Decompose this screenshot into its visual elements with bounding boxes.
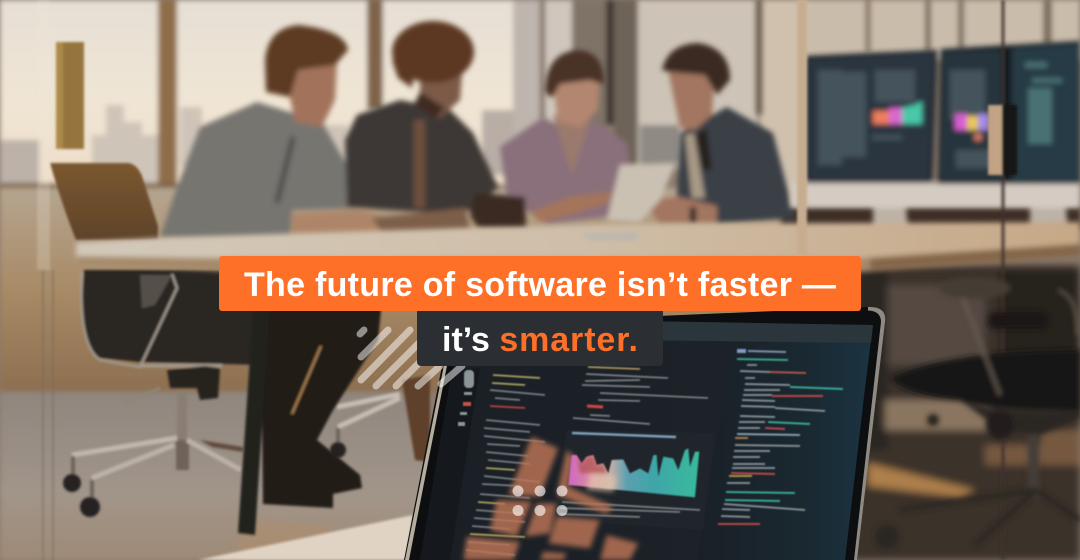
headline line 1: orange banner [219,256,861,311]
screens [806,50,937,183]
floor [0,392,430,560]
monitor stand bar [790,183,1080,208]
white foreground table corner [198,515,413,560]
chair back [50,163,158,240]
city skyline [0,105,680,184]
person 1: grey shirt [160,25,405,238]
glass partition lines [43,270,53,560]
laptop body [404,307,885,560]
area chart [568,448,699,497]
lower wall [0,188,800,392]
dot grid decoration [512,486,568,516]
second chair base behind legs [337,394,400,427]
code lines: right column [718,351,843,524]
window frames [158,0,1052,184]
screen text hints [818,70,991,168]
thin dark post [1001,0,1005,560]
right lower room [850,265,1080,560]
chart panel [552,430,715,530]
person 2: dark shirt with afro [345,21,498,238]
seat and dark underside [82,270,262,365]
tablet [470,193,526,230]
sidebar icons [458,370,474,426]
headline line 2: dark banner: it’s smarter. [442,321,639,359]
diagonal stripes decoration [360,330,462,386]
seated figure legs and table leg [238,270,385,535]
windows [0,0,1080,200]
laptop screen [420,318,873,560]
metal post [797,0,807,258]
table top [76,222,1080,272]
code lines: middle and left columns [466,367,708,555]
left chair [43,163,430,560]
person 4: dark blue-grey shirt [662,43,795,224]
right panel [697,345,870,560]
person 3: mauve blouse [500,50,630,224]
headline line 2: dark banner [417,311,663,366]
gold block [56,42,84,149]
people [160,21,795,238]
hands of person 4 [643,197,717,224]
right foreground chair [875,277,1080,549]
monitors [790,41,1080,236]
headline line 1: orange banner: The future of software isn’t faster — [244,266,836,304]
laptop [404,307,885,560]
reflected window panes on screen [463,437,638,560]
paper [607,163,676,222]
colour charts on monitors [873,101,989,141]
sidebar [420,368,480,560]
